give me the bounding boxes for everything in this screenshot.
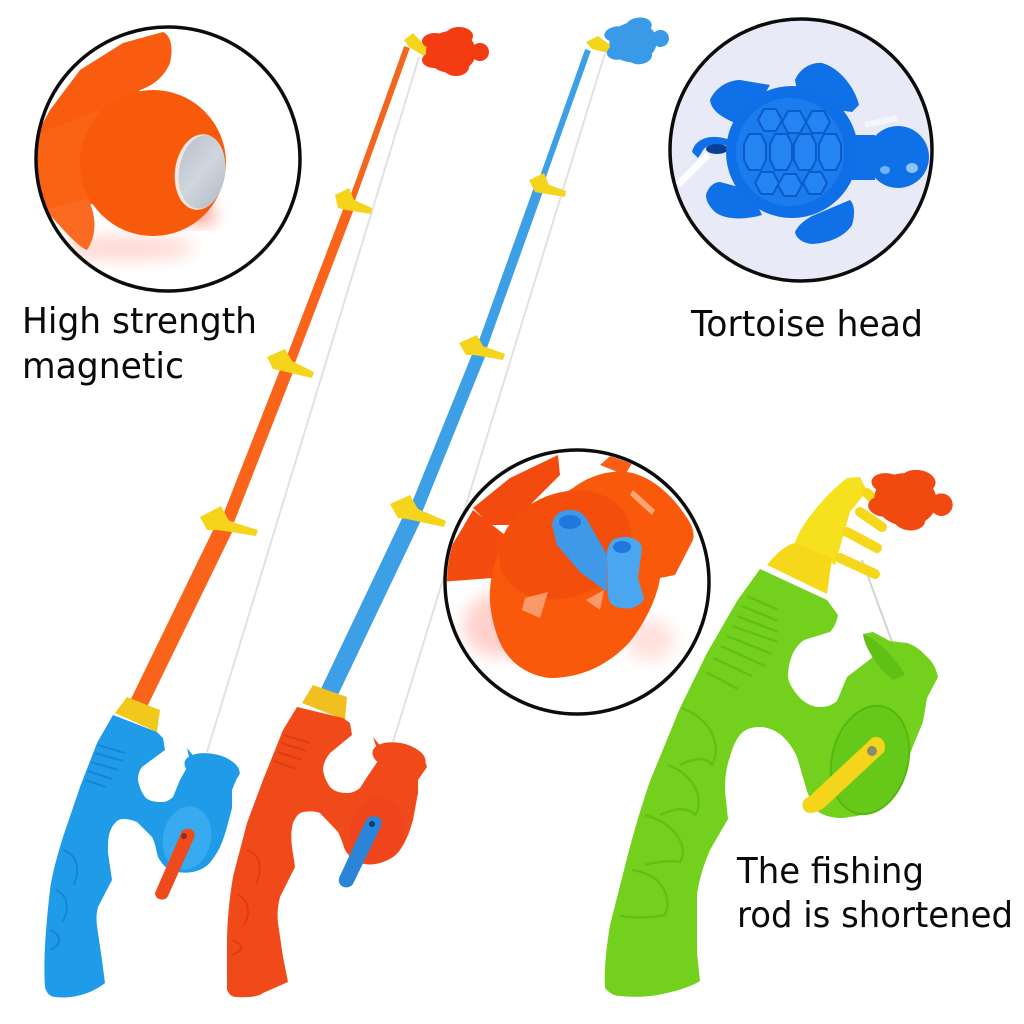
reel face [157, 802, 217, 874]
fish sphere [80, 90, 226, 236]
reel inner ring [499, 490, 631, 600]
pink glow [464, 593, 536, 657]
yellow collar [115, 697, 160, 732]
panel: tortoise head detail circle [670, 19, 932, 281]
rod guides [200, 33, 429, 536]
reel crank [155, 829, 195, 900]
orange rod with blue handle [44, 27, 489, 997]
text: high strength magnetic: magnetic [22, 346, 184, 387]
text: high strength magnetic: High strength [22, 301, 257, 342]
icon: shell pattern [744, 109, 841, 196]
green handle [605, 569, 938, 997]
panel: magnet detail circle [30, 27, 300, 291]
head highlights [906, 163, 918, 173]
reel crank [802, 737, 885, 813]
icon: magnet disc [174, 134, 226, 210]
orange fish lobes [40, 32, 172, 133]
text: tortoise head: Tortoise head [690, 304, 923, 345]
orange handle [227, 707, 427, 997]
grip ribs [50, 745, 125, 950]
icon: blue crank handle [552, 510, 607, 592]
yellow collar [302, 685, 347, 720]
text: rod is shortened: rod is shortened [737, 895, 1013, 936]
reel crank [339, 816, 381, 887]
reel face [820, 697, 920, 823]
text: rod is shortened [736, 851, 1013, 936]
yellow spiral tip [767, 477, 883, 594]
icon: turtle [692, 63, 929, 244]
highlights [522, 592, 548, 618]
pink glow [55, 236, 195, 260]
icon: red turtle float [865, 464, 957, 536]
grip ribs [232, 735, 310, 955]
blue handle [44, 715, 240, 997]
reel cap [182, 748, 242, 788]
panel: reel crank detail circle [440, 450, 709, 714]
green shortened rod [605, 464, 957, 997]
reel face [345, 793, 409, 867]
blue rod with orange handle [227, 14, 672, 997]
text: rod is shortened: The fishing [736, 851, 924, 892]
reel cap [370, 738, 428, 776]
string [678, 155, 708, 185]
rod guides [390, 36, 613, 527]
text: high strength magnetic [22, 301, 257, 387]
orange reel body [490, 472, 694, 678]
icon: orange turtle float [422, 27, 489, 76]
grip ribs [620, 596, 778, 917]
upper left arm [473, 455, 560, 525]
icon: blue turtle float [603, 14, 672, 69]
reel cap [863, 634, 905, 680]
left arm [447, 510, 504, 582]
